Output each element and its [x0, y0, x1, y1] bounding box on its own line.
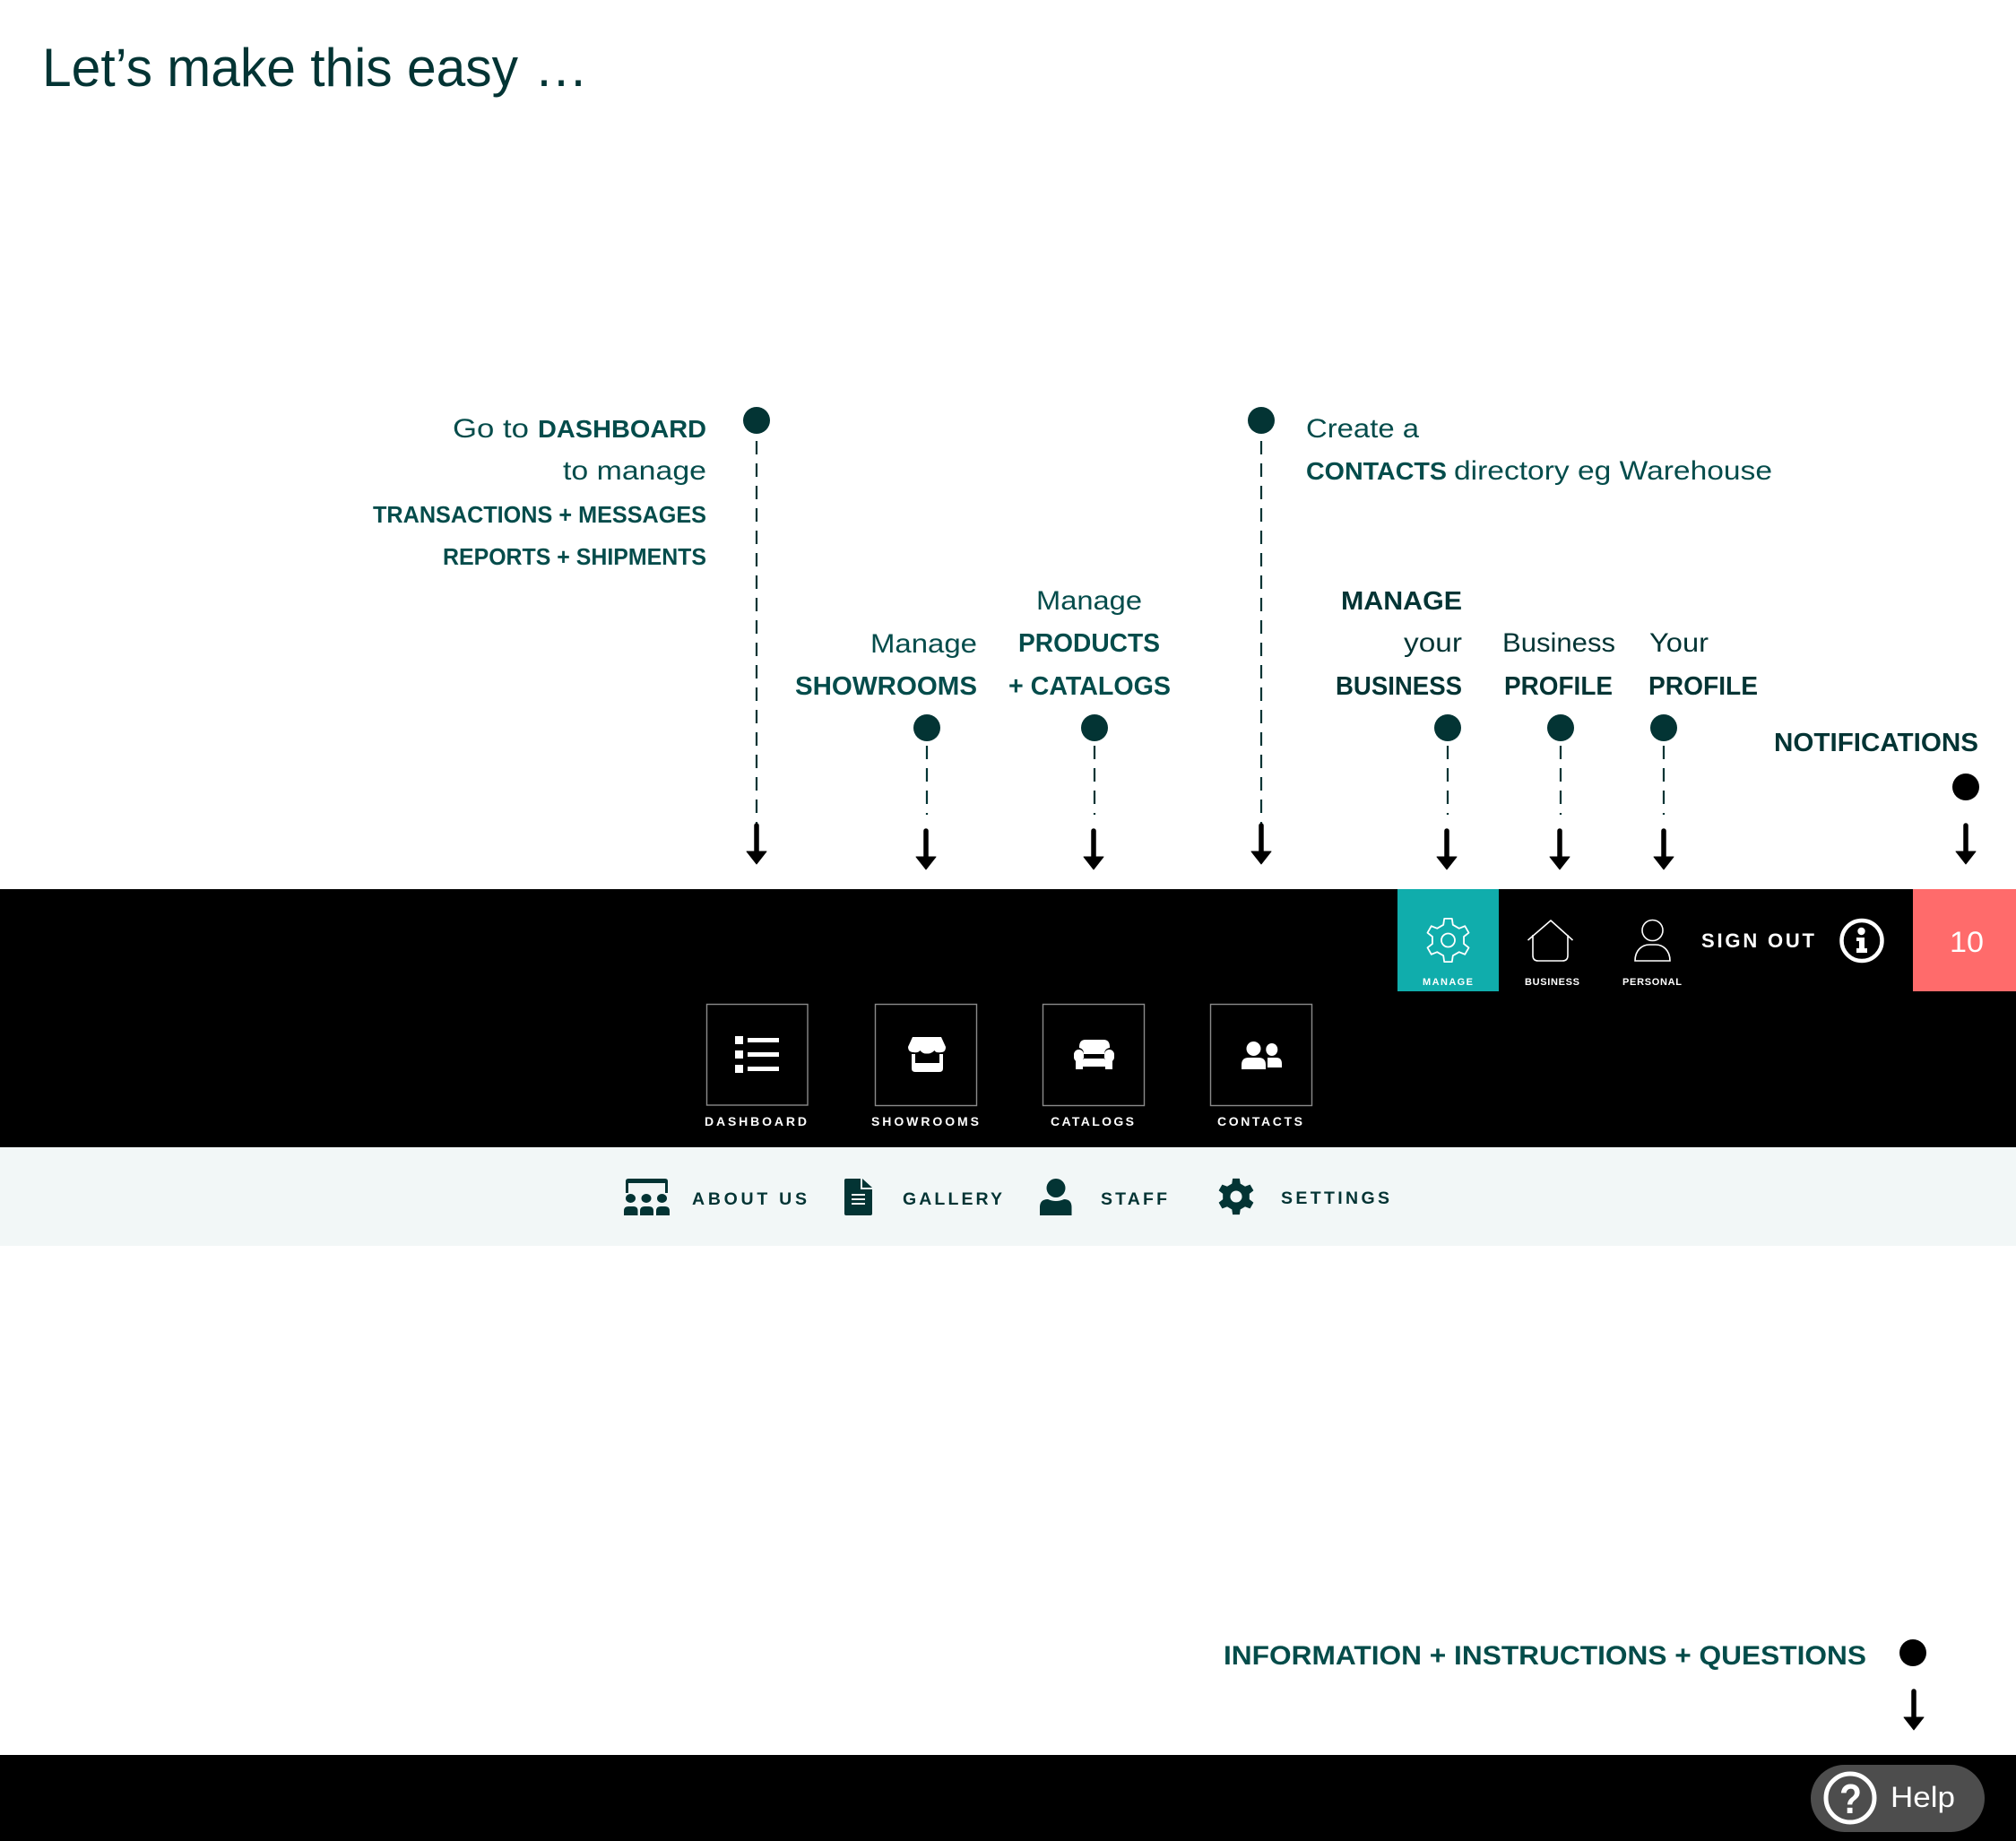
- dashed connector: dashboard: [756, 441, 757, 829]
- nav tab: manage: [1397, 889, 1499, 991]
- marker dot: notifications: [1952, 774, 1979, 800]
- label: catalogs: CATALOGS: [1051, 1114, 1134, 1128]
- callout text: business profile: Business: [1502, 628, 1615, 658]
- label: about us: ABOUT US: [692, 1189, 807, 1209]
- icon: people: [1242, 1042, 1282, 1069]
- label: contacts: CONTACTS: [1217, 1114, 1302, 1128]
- panel: bottom black footer: [0, 1755, 2016, 1841]
- icon: person outline: [1635, 920, 1670, 961]
- sign out link: SIGN OUT: [1701, 929, 1815, 952]
- callout text: manage business: [1336, 587, 1462, 701]
- label: staff: STAFF: [1101, 1189, 1167, 1209]
- title: …: [534, 38, 588, 98]
- callout text: dashboard: REPORTS + SHIPMENTS: [443, 545, 706, 570]
- menu item: showrooms: [871, 1004, 979, 1128]
- callout text: dashboard: Go to: [453, 414, 529, 444]
- callout text: manage business: MANAGE: [1341, 587, 1462, 616]
- dashed connector: manage: [1447, 746, 1449, 815]
- menu item: dashboard: [705, 1004, 808, 1128]
- label: business: BUSINESS: [1525, 977, 1579, 988]
- callout text: your profile: Your: [1649, 628, 1709, 658]
- callout: your profile: [1648, 628, 1758, 869]
- icon: armchair: [1074, 1040, 1114, 1069]
- panel: black navigation band: [0, 889, 2016, 1147]
- callout: notifications: [1774, 729, 1979, 864]
- dashed connector: catalogs: [1094, 746, 1095, 815]
- callout text: your profile: [1648, 628, 1758, 701]
- callout text: business profile: PROFILE: [1504, 672, 1613, 701]
- dashed connector: business profile: [1560, 746, 1562, 815]
- callout text: showrooms: SHOWROOMS: [795, 672, 977, 701]
- callout text: manage business: your: [1404, 628, 1462, 658]
- icon: manage gear: [1427, 919, 1469, 962]
- notification badge: 10: [1950, 926, 1984, 958]
- icon: storefront: [908, 1037, 946, 1072]
- icon: question mark: [1826, 1774, 1874, 1822]
- menu item: catalogs: [1043, 1004, 1144, 1128]
- marker dot: catalogs: [1081, 714, 1108, 741]
- dashed connector: contacts: [1260, 441, 1262, 829]
- dashed connector: showrooms: [926, 746, 928, 815]
- callout: contacts: [1248, 407, 1772, 864]
- icon: list: [735, 1036, 779, 1073]
- icon: house outline: [1527, 920, 1572, 961]
- marker dot: help: [1899, 1639, 1926, 1666]
- title: Let’s make this easy: [42, 38, 518, 98]
- label: gallery: GALLERY: [903, 1189, 1002, 1209]
- dashed connector: your profile: [1663, 746, 1665, 815]
- notification badge: [1913, 889, 2016, 991]
- arrow: contacts: [1251, 825, 1271, 864]
- icon: question mark: ?: [1839, 1776, 1862, 1822]
- marker dot: your profile: [1650, 714, 1677, 741]
- menu item: contacts: [1210, 1004, 1312, 1128]
- marker dot: showrooms: [913, 714, 940, 741]
- callout text: contacts: [1306, 414, 1772, 486]
- help button: [1811, 1765, 1985, 1832]
- callout: information and help: [1224, 1639, 1926, 1730]
- callout text: information: INFORMATION + INSTRUCTIONS + QUESTIONS: [1224, 1641, 1866, 1671]
- callout text: showrooms: [795, 629, 977, 701]
- callout text: contacts: directory eg Warehouse: [1454, 456, 1772, 486]
- arrow: notifications: [1956, 825, 1976, 864]
- sub-nav item: settings: [1219, 1179, 1389, 1214]
- sub-nav item: staff: [1040, 1179, 1167, 1215]
- callout text: dashboard: to manage: [563, 456, 706, 486]
- callout: showrooms: [795, 629, 977, 869]
- icon: audience: [624, 1179, 670, 1215]
- nav tab: business: [1525, 920, 1579, 988]
- sub-nav item: about us: [624, 1179, 807, 1215]
- callout: manage business: [1336, 587, 1462, 869]
- marker dot: dashboard: [743, 407, 770, 434]
- marker dot: manage: [1434, 714, 1461, 741]
- marker dot: contacts: [1248, 407, 1275, 434]
- callout text: catalogs: [1008, 586, 1171, 701]
- sub-nav item: gallery: [844, 1179, 1002, 1215]
- panel: light sub-navigation band: [0, 1147, 2016, 1246]
- icon: person: [1040, 1179, 1072, 1215]
- callout: dashboard: [373, 407, 770, 864]
- nav tab: personal: [1622, 920, 1682, 988]
- arrow: catalogs: [1084, 831, 1103, 869]
- arrow: showrooms: [916, 831, 936, 869]
- callout text: your profile: PROFILE: [1648, 672, 1758, 701]
- callout text: dashboard: [373, 414, 706, 570]
- label: settings: SETTINGS: [1281, 1188, 1389, 1208]
- label: personal: PERSONAL: [1622, 977, 1682, 988]
- callout text: catalogs: Manage: [1036, 586, 1142, 616]
- callout text: dashboard: TRANSACTIONS + MESSAGES: [373, 503, 706, 528]
- arrow: manage: [1437, 831, 1457, 869]
- callout text: dashboard: DASHBOARD: [538, 415, 706, 443]
- icon: document: [844, 1179, 872, 1215]
- callout text: contacts: Create a: [1306, 414, 1419, 444]
- callout text: business profile: [1502, 628, 1615, 701]
- arrow: your profile: [1654, 831, 1674, 869]
- arrow: business profile: [1550, 831, 1570, 869]
- icon: settings gear: [1219, 1179, 1253, 1214]
- label: manage: MANAGE: [1423, 977, 1473, 988]
- arrow: help: [1904, 1691, 1924, 1730]
- icon: information: [1841, 920, 1882, 961]
- callout text: showrooms: Manage: [870, 629, 977, 659]
- callout text: contacts: CONTACTS: [1306, 457, 1447, 485]
- callout: catalogs: [1008, 586, 1171, 869]
- marker dot: business profile: [1547, 714, 1574, 741]
- label: dashboard: DASHBOARD: [705, 1114, 807, 1128]
- label: help: Help: [1891, 1781, 1955, 1813]
- label: showrooms: SHOWROOMS: [871, 1114, 979, 1128]
- arrow: dashboard: [747, 825, 766, 864]
- callout text: catalogs: PRODUCTS: [1018, 629, 1160, 658]
- callout text: catalogs: + CATALOGS: [1008, 672, 1171, 701]
- callout text: manage business: BUSINESS: [1336, 672, 1462, 701]
- callout: business profile: [1502, 628, 1615, 869]
- callout text: notifications: NOTIFICATIONS: [1774, 729, 1978, 757]
